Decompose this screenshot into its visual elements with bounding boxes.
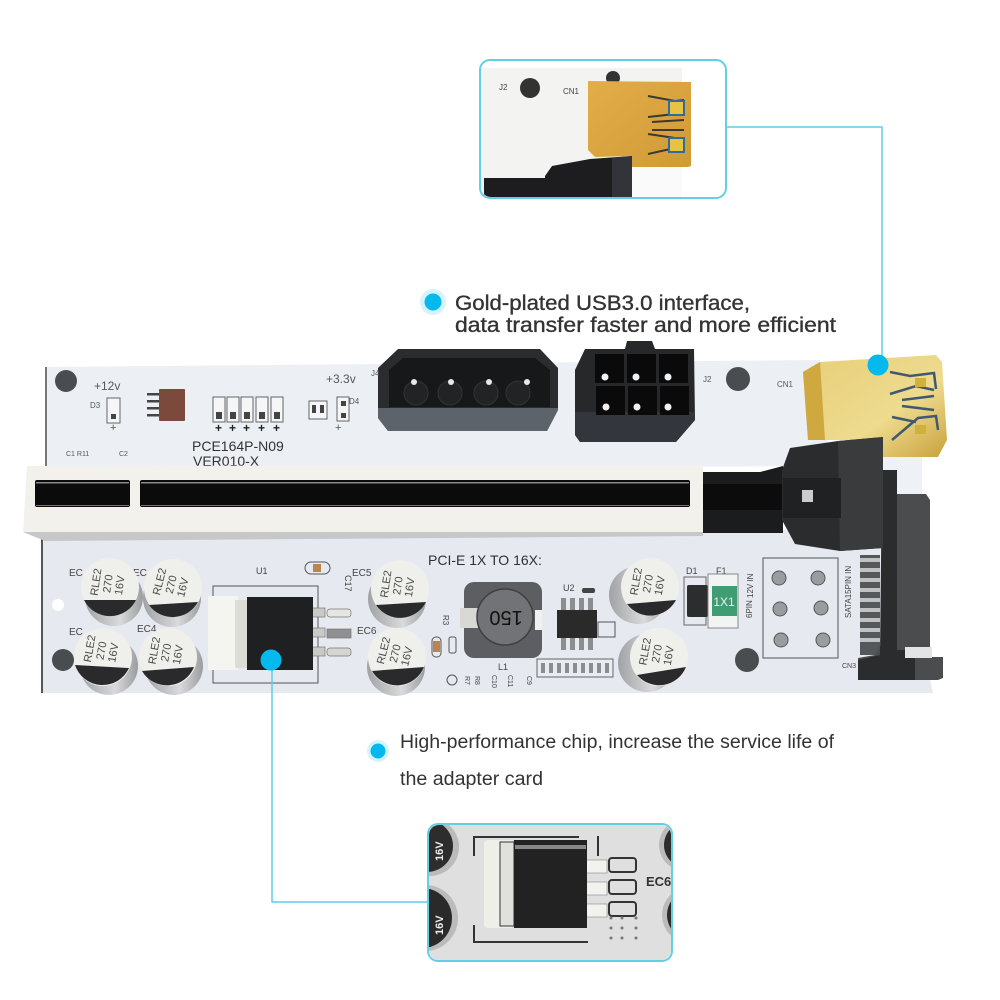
silkscreen upper: + (110, 422, 116, 434)
diode and fuse: 1X1 (713, 595, 735, 609)
silkscreen upper: + (243, 421, 250, 435)
silkscreen upper (66, 372, 360, 469)
capacitors: 270 (101, 574, 116, 594)
capacitors: RLE2 (637, 637, 654, 666)
silkscreen lower: R3 (441, 615, 450, 626)
upper board (45, 360, 830, 470)
callout line: chip to inset (272, 660, 428, 902)
capacitors: RLE2 (147, 636, 163, 665)
small footprints (213, 558, 838, 685)
text: gold-plated USB description (455, 292, 836, 337)
capacitors (74, 558, 688, 696)
SATA connector (858, 470, 943, 680)
capacitors: 16V (113, 574, 128, 596)
silkscreen lower: F1 (716, 566, 727, 576)
silkscreen lower: EC5 (352, 568, 372, 579)
U3 chip (147, 389, 185, 421)
inset: USB port detail: CN1 (563, 87, 580, 96)
capacitors: RLE2 (628, 567, 645, 596)
silkscreen upper: + (215, 421, 222, 435)
silkscreen upper: +3.3v (326, 372, 356, 386)
silkscreen lower: EC (69, 568, 83, 579)
inset: chip detail: EC6 (646, 874, 671, 889)
capacitors: 270 (164, 574, 180, 595)
callout dot: USB port (868, 354, 888, 376)
silkscreen lower: EC (69, 627, 83, 638)
capacitors: 270 (159, 643, 174, 663)
U2 chip (557, 588, 597, 650)
capacitors: RLE2 (82, 634, 99, 663)
silkscreen lower: R8 (473, 676, 480, 685)
silkscreen lower: EC4 (137, 624, 157, 635)
U1 regulator chip (208, 596, 351, 670)
inductor: 150 (489, 606, 523, 628)
capacitors: 16V (403, 576, 418, 598)
silkscreen upper: +12v (94, 379, 120, 393)
capacitors: 16V (175, 576, 192, 598)
capacitors: RLE2 (151, 567, 169, 597)
silkscreen lower: 12V IN (746, 573, 755, 598)
silkscreen upper: + (273, 421, 280, 435)
silkscreen upper: + (335, 422, 341, 434)
bullet: chip (367, 740, 389, 762)
capacitor corners: 16V (434, 841, 446, 861)
inductor (460, 582, 542, 658)
inset: chip detail (427, 823, 673, 962)
capacitors: 16V (399, 645, 416, 667)
black clip (484, 156, 632, 198)
adapter card photo (23, 341, 947, 696)
silkscreen upper: VER010-X (193, 453, 260, 469)
silkscreen upper: C1 R11 (66, 451, 89, 458)
mounting holes (52, 367, 759, 672)
capacitors: RLE2 (379, 570, 394, 599)
callout dot: chip (260, 650, 282, 670)
capacitors: 270 (391, 576, 406, 596)
silkscreen lower: U2 (563, 583, 575, 593)
gold connector (588, 81, 691, 167)
chip body (514, 840, 636, 928)
text: gold-plated USB description: Gold-plated USB3.0 interface, (455, 292, 750, 315)
inset: USB port detail: J2 (499, 83, 508, 92)
inset: USB port detail (480, 60, 726, 198)
callout line: USB inset to port (726, 127, 882, 365)
silkscreen lower: SATA15PIN IN (844, 566, 853, 618)
text: gold-plated USB description: data transfer faster and more efficient (455, 314, 836, 337)
silkscreen upper: PCE164P-N09 (192, 438, 284, 454)
silkscreen lower: 6PIN (745, 600, 754, 618)
silkscreen lower: EC6 (357, 626, 377, 637)
LED footprints (107, 397, 349, 423)
silkscreen lower: U1 (256, 566, 268, 576)
capacitors: 270 (650, 644, 665, 664)
silkscreen lower: C9 (525, 676, 532, 685)
capacitors: 270 (95, 641, 110, 661)
black riser clip (703, 437, 883, 551)
capacitors: 270 (641, 574, 656, 594)
capacitors: 16V (662, 644, 677, 666)
silkscreen upper: C2 (119, 451, 128, 458)
6-pin power connector (575, 341, 695, 442)
capacitors: 16V (171, 643, 186, 665)
lower board (41, 530, 933, 693)
adapter card photo: CN1 (777, 380, 794, 389)
capacitors: 16V (106, 641, 122, 664)
silkscreen upper: + (258, 421, 265, 435)
silkscreen lower: D1 (686, 566, 698, 576)
capacitors: RLE2 (89, 568, 104, 597)
silkscreen upper: + (229, 421, 236, 435)
silkscreen lower: C17 (343, 575, 353, 592)
capacitor corners: 16V (434, 915, 446, 935)
silkscreen upper: D4 (349, 397, 360, 406)
SATA pin holes (772, 571, 830, 647)
silkscreen lower: C10 (490, 675, 497, 688)
silkscreen lower: EC (133, 568, 147, 579)
capacitors: RLE2 (375, 636, 393, 666)
pad strip footprint (537, 659, 613, 677)
text: chip description: the adapter card (400, 769, 543, 790)
bullet: gold-plated USB (420, 289, 446, 315)
adapter card photo: J2 (703, 375, 712, 384)
silkscreen lower: C11 (506, 675, 513, 687)
SATA solder pins (860, 555, 880, 655)
silkscreen lower: L1 (498, 662, 508, 672)
gold USB port (803, 355, 947, 457)
text: chip description: High-performance chip, increase the service life of (400, 732, 835, 753)
PCIe slot (23, 465, 703, 541)
capacitors: 16V (653, 574, 668, 596)
silkscreen lower: CN3 (842, 663, 856, 670)
silkscreen lower: R7 (463, 676, 470, 685)
capacitor corners (429, 825, 671, 951)
silkscreen lower: PCI-E 1X TO 16X: (428, 552, 542, 568)
text: chip description (400, 732, 835, 790)
adapter card photo: J4 (371, 369, 380, 378)
capacitors: 270 (388, 643, 404, 664)
diode and fuse (684, 574, 738, 628)
white board strip below USB (878, 452, 922, 495)
silkscreen upper: D3 (90, 401, 101, 410)
silkscreen lower (69, 552, 856, 688)
4-pin molex connector (378, 349, 558, 431)
